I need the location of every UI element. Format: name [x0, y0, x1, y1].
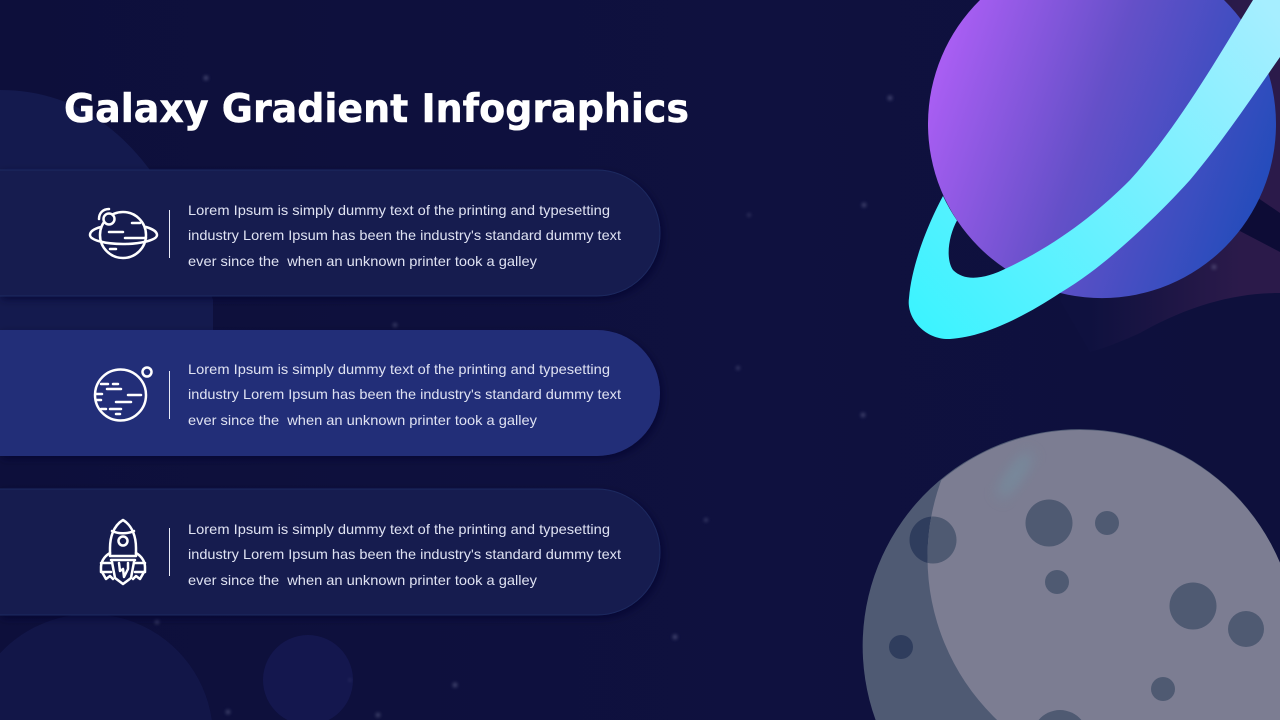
card 1 background — [0, 170, 660, 296]
background stars — [155, 76, 1216, 717]
divider — [169, 371, 170, 419]
planet body — [928, 0, 1276, 298]
panel: card 2 — [0, 330, 660, 456]
illustration: cratered moon — [860, 425, 1280, 720]
text block: ever since the when an unknown printer took a galley — [188, 412, 537, 428]
moon shadow side — [863, 429, 1280, 720]
icon: planet with small moon — [95, 368, 152, 420]
title: Galaxy Gradient Infographics — [64, 87, 689, 132]
panel: card 3 — [0, 489, 660, 615]
decorative background shapes — [0, 90, 353, 720]
moon lit side — [928, 430, 1280, 720]
text block — [188, 521, 621, 588]
divider — [169, 528, 170, 576]
card 3 background — [0, 489, 660, 615]
text block: industry Lorem Ipsum has been the industry's standard dummy text — [188, 386, 621, 402]
text block — [188, 202, 621, 269]
icon: rocket — [101, 520, 145, 584]
text block: industry Lorem Ipsum has been the industry's standard dummy text — [188, 546, 621, 562]
card 2 background — [0, 330, 660, 456]
divider — [169, 210, 170, 258]
illustration: ringed planet — [909, 0, 1280, 339]
icon: ringed planet with moon — [90, 209, 157, 258]
panel: card 1 — [0, 170, 660, 296]
text block: Lorem Ipsum is simply dummy text of the printing and typesetting — [188, 521, 610, 537]
planet ring — [909, 0, 1280, 339]
purple nebula behind planet — [1060, 0, 1280, 352]
text block: Lorem Ipsum is simply dummy text of the printing and typesetting — [188, 202, 610, 218]
text block: Lorem Ipsum is simply dummy text of the printing and typesetting — [188, 361, 610, 377]
text block — [188, 361, 621, 428]
text block: ever since the when an unknown printer took a galley — [188, 572, 537, 588]
text block: ever since the when an unknown printer took a galley — [188, 253, 537, 269]
text block: industry Lorem Ipsum has been the industry's standard dummy text — [188, 227, 621, 243]
